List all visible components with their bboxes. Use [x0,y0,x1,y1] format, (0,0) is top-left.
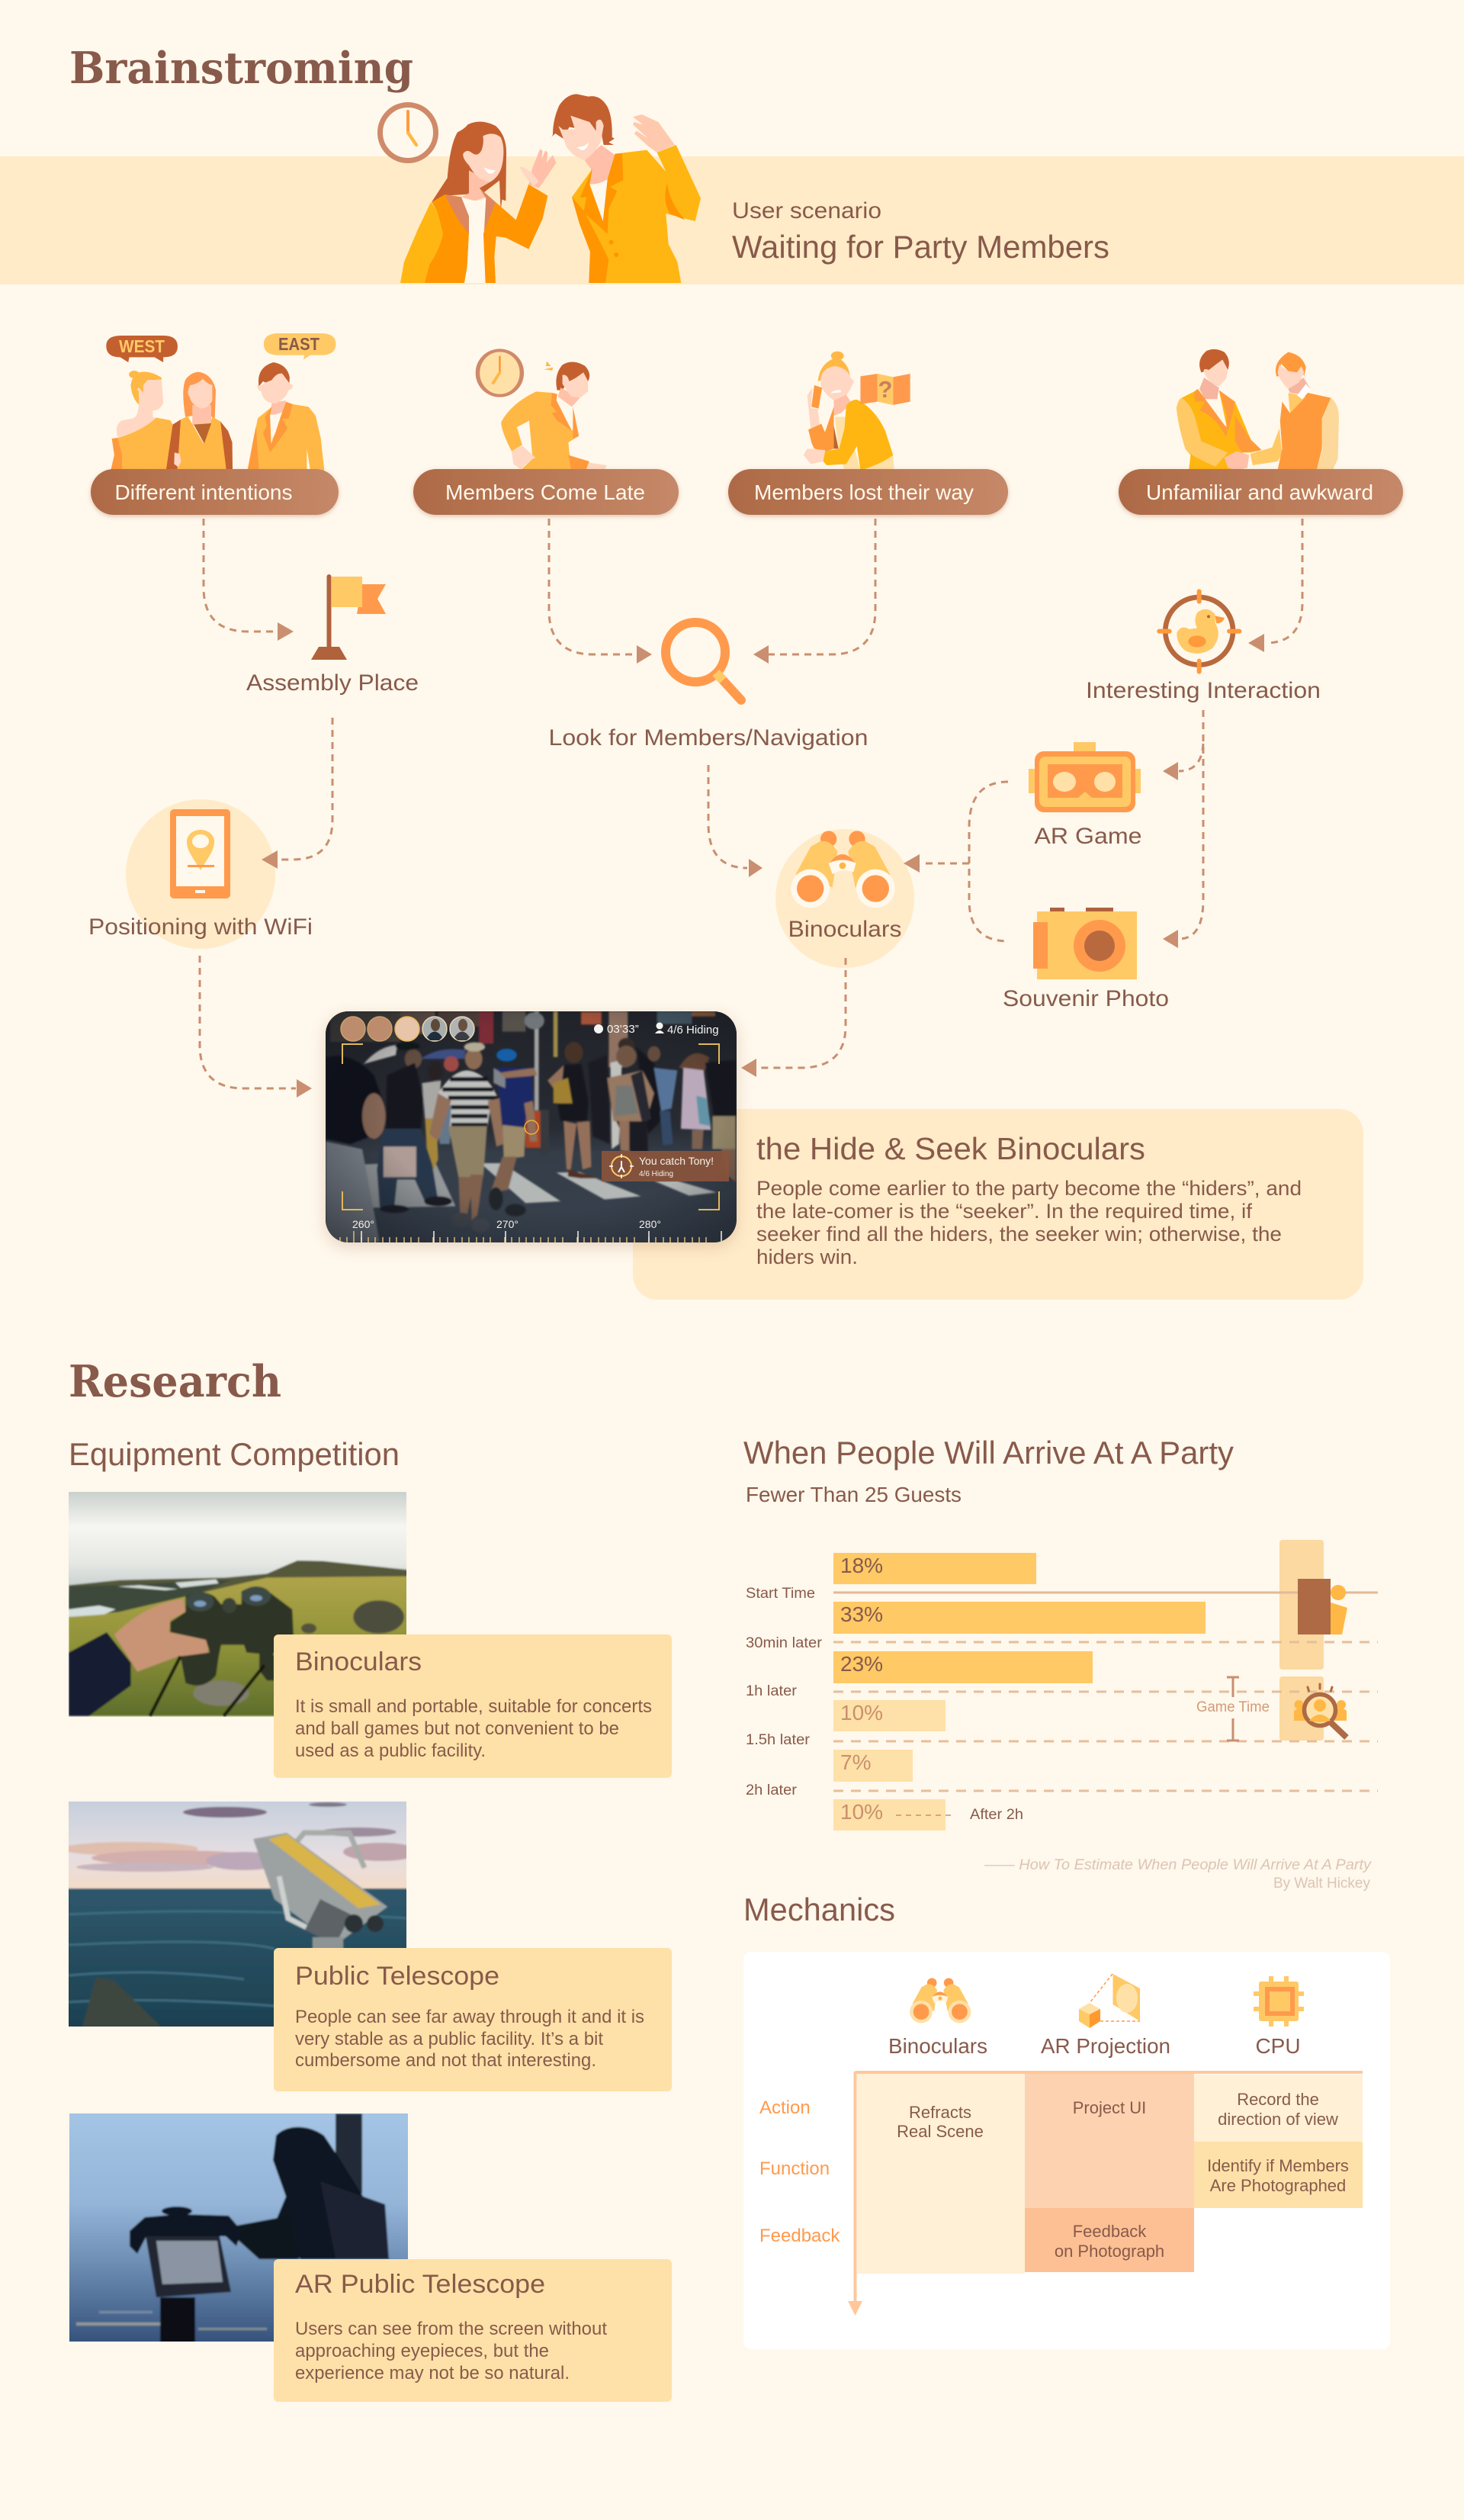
scenario text: User scenario [732,198,881,223]
chart: arrival bars [746,1540,1378,1831]
column labels [888,2034,1301,2058]
chart: arrival bars: 10% [840,1701,883,1724]
card: Binoculars: and ball games but not convenient to be [295,1718,619,1739]
citation: —— How To Estimate When People Will Arrive At A Party [984,1857,1372,1873]
panel: hide and seek description: seeker find all the hiders, the seeker win; otherwise, the [756,1223,1282,1246]
panel: hide and seek description: the late-comer is the “seeker”. In the required time, if [756,1200,1253,1223]
label: Assembly Place: Assembly Place [246,670,419,696]
chart: arrival bars: 18% [840,1554,883,1577]
card: Binoculars: used as a public facility. [295,1741,486,1761]
scenario text [732,198,1109,265]
icon: binoculars small [910,1978,971,2023]
chart: arrival bars: 30min later [746,1635,823,1651]
title: Brainstroming: Brainstroming [69,43,413,94]
subheading: Fewer Than 25 Guests: Fewer Than 25 Guests [746,1483,962,1506]
cells: Record the [1237,2090,1319,2109]
icon: magnifier [666,622,741,700]
cells: Project UI [1073,2098,1146,2117]
card: Public Telescope: very stable as a public facility. It’s a bit [295,2029,603,2049]
card: AR Public Telescope: approaching eyepieces, but the [295,2341,549,2361]
card: Binoculars: It is small and portable, suitable for concerts [295,1696,652,1717]
card: Public Telescope: People can see far away through it and it is [295,2007,644,2027]
card: Public Telescope: Public Telescope [295,1962,499,1991]
label: Souvenir Photo: Souvenir Photo [1003,986,1169,1011]
illustration: late member with clock [477,350,607,471]
card: Binoculars: Binoculars [295,1647,422,1676]
label: Interesting Interaction: Interesting Interaction [1086,678,1321,703]
heading: Research: Research [69,1356,281,1407]
chart: arrival bars: Game Time [1196,1699,1270,1715]
problem pills: Different intentions [114,481,293,504]
cells: on Photograph [1055,2242,1164,2261]
chart: arrival bars: 2h later [746,1782,798,1798]
row labels: Feedback [759,2226,840,2246]
heading: When People Will Arrive At A Party: When People Will Arrive At A Party [743,1435,1234,1471]
icon: phone with location pin [126,799,275,949]
arrows: brainstorm flow connectors [200,519,1302,1098]
illustration: man waving [551,94,701,283]
card: Public Telescope: cumbersome and not that interesting. [295,2050,596,2071]
panel: hide and seek description: People come earlier to the party become the “hiders”, and [756,1177,1302,1200]
chart: arrival bars: 10% [840,1800,883,1824]
chart: arrival bars: 1h later [746,1683,798,1699]
AR binoculars screenshot: 270° [496,1218,518,1230]
cells: Real Scene [897,2122,984,2141]
photo: AR telescope with silhouette [65,2109,413,2345]
citation: By Walt Hickey [1273,1876,1370,1892]
AR binoculars screenshot: 03’33” [607,1023,639,1036]
problem pills: Members lost their way [754,481,974,504]
icon: AR projection [1079,1974,1140,2028]
card: AR Public Telescope: experience may not be so natural. [295,2363,570,2383]
card: AR Public Telescope: AR Public Telescope [295,2270,545,2299]
AR binoculars screenshot: You catch Tony! [639,1155,714,1167]
AR binoculars screenshot: 280° [639,1218,661,1230]
chart: arrival bars: After 2h [970,1807,1023,1823]
scenario band [0,156,1464,284]
label: Positioning with WiFi: Positioning with WiFi [88,914,313,940]
cells: Identify if Members [1207,2156,1349,2175]
circle with binoculars icon and label: Binoculars [788,917,901,942]
panel: hide and seek description [633,1109,1363,1300]
heading: Equipment Competition: Equipment Competition [69,1436,400,1472]
icon: flag [311,574,386,660]
AR binoculars screenshot: 260° [352,1218,374,1230]
illustration: woman waving [400,122,556,283]
column labels: Binoculars [888,2034,987,2058]
chart: arrival bars: Start Time [746,1586,815,1602]
illustration: three people with speech bubbles: WEST [119,336,165,356]
icon: AR headset [1029,742,1141,812]
photo: public telescope over sea [61,1798,419,2030]
AR binoculars screenshot [326,1011,737,1247]
chart: arrival bars: 7% [840,1750,871,1774]
card: AR Public Telescope: Users can see from the screen without [295,2319,607,2339]
problem pills: Unfamiliar and awkward [1146,481,1373,504]
icon: duck in crosshair [1159,591,1239,672]
heading: Mechanics: Mechanics [743,1892,895,1927]
column labels: AR Projection [1041,2034,1170,2058]
scenario text: Waiting for Party Members [732,229,1109,265]
cells: direction of view [1218,2110,1338,2129]
row labels: Function [759,2158,830,2179]
card: AR Public Telescope [274,2259,672,2402]
card: Binoculars [274,1634,672,1778]
chart: arrival bars: 23% [840,1652,883,1676]
panel: hide and seek description: hiders win. [756,1246,858,1268]
chart: arrival bars: 33% [840,1602,883,1626]
cells: Refracts [909,2103,971,2122]
label: AR Game: AR Game [1034,824,1142,849]
cells: Are Photographed [1210,2176,1346,2195]
panel: mechanics table [743,1952,1390,2349]
illustration: lost woman with map: ? [878,376,892,403]
icon: wall clock [380,105,436,160]
panel: hide and seek description: the Hide & Seek Binoculars [756,1131,1145,1166]
circle with binoculars icon and label [775,829,914,968]
chart: arrival bars: 1.5h later [746,1732,811,1748]
axes with arrow [848,2072,1363,2316]
cells [857,2074,1363,2274]
illustration: lost woman with map [804,352,910,471]
citation [984,1857,1372,1892]
row labels [759,2097,840,2246]
problem pills: Members Come Late [445,481,645,504]
label: Look for Members/Navigation: Look for Members/Navigation [549,725,868,751]
illustration: two people shaking hands [1177,349,1339,471]
icon: CPU [1254,1976,1304,2027]
AR binoculars screenshot: 4/6 Hiding [639,1170,673,1178]
row labels: Action [759,2097,811,2118]
cells: Feedback [1073,2222,1147,2241]
icon: camera [1033,908,1137,979]
photo: hand holding binoculars [66,1491,409,1716]
illustration: three people with speech bubbles [106,333,336,471]
column labels: CPU [1255,2034,1301,2058]
AR binoculars screenshot: 4/6 Hiding [667,1024,719,1037]
card: Public Telescope [274,1948,672,2091]
problem pills [91,469,1403,515]
illustration: three people with speech bubbles: EAST [278,334,319,354]
